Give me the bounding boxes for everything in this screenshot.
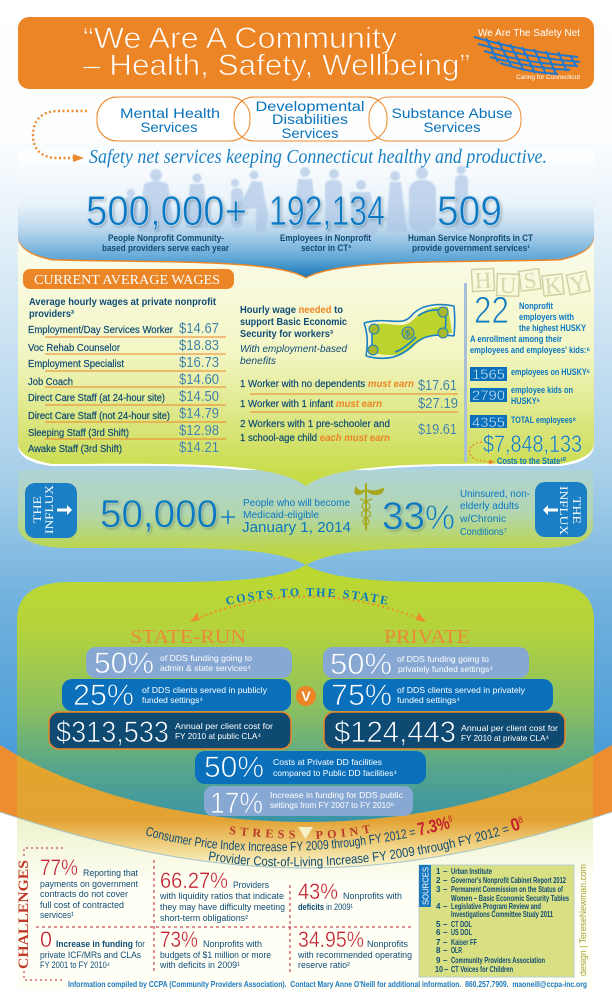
needed wage intro text: With employment-based: [240, 344, 347, 355]
designer credit: design | TereseNewman.com: [578, 864, 589, 976]
costs comparison 50%: 50%: [204, 751, 264, 784]
husky 22 employers: employers with: [519, 312, 574, 322]
sources list: –: [443, 885, 448, 894]
state-run: 50% funding: of DDS funding going to: [160, 653, 252, 663]
title: [83, 22, 470, 82]
sources list: –: [443, 920, 448, 929]
panel: the influx: [18, 470, 593, 565]
private: 50% funding: of DDS funding going to: [397, 654, 489, 664]
influx right badge: INFLUX: [557, 486, 571, 535]
challenge: 77%: full cost of contracted: [40, 900, 124, 910]
stat 500,000+: 500,000+: [86, 187, 247, 234]
husky cost to state: Costs to the State¹⁰: [497, 456, 566, 466]
icon: caduceus: [355, 484, 384, 530]
challenge: 43%: 43%: [298, 879, 338, 904]
sources list: Investigations Committee Study 2011: [451, 910, 553, 919]
challenge: 66.27%: [159, 868, 285, 923]
sources list: 8: [436, 946, 441, 955]
challenge: 34.95%: 34.95%: [298, 927, 364, 952]
husky 22 employers: A enrollment among their: [470, 334, 562, 344]
state-run: annual cost: FY 2010 at public CLA⁴: [175, 731, 261, 741]
husky counts: HUSKY⁶: [511, 396, 540, 406]
wages pill heading: CURRENT AVERAGE WAGES: [34, 273, 220, 288]
needed wage rows: $19.61: [418, 421, 457, 438]
wage table: $14.50: [179, 388, 219, 405]
sources list: –: [443, 956, 448, 965]
developmental disabilities label: [256, 98, 364, 141]
sources list: –: [443, 867, 448, 876]
husky 22 employers: Nonprofit: [519, 301, 553, 311]
sources list: Governor's Nonprofit Cabinet Report 2012: [451, 876, 566, 885]
sources list: –: [444, 965, 449, 974]
state-run: 50% funding: [86, 647, 292, 680]
influx text: uninsured: Conditions⁷: [460, 527, 507, 538]
influx big number 50,000+: +: [219, 501, 237, 534]
wage table: $12.98: [179, 422, 219, 439]
sources list: 1: [436, 867, 441, 876]
needed wage rows: 1 school-age child each must earn: [240, 433, 390, 444]
wage table: Voc Rehab Counselor: [28, 343, 121, 354]
state-run: 25% clients: funded settings⁴: [142, 695, 203, 705]
influx text: uninsured: [459, 489, 530, 538]
challenge: 73%: 73%: [160, 927, 198, 952]
sources list: OLR: [451, 946, 462, 955]
mental health label: Services: [140, 119, 198, 135]
wage table: $16.73: [179, 354, 219, 371]
state-run: annual cost: [49, 712, 291, 749]
sources list: 6: [436, 928, 441, 937]
husky counts: 4355: [472, 414, 505, 430]
sources tab: SOURCES: [420, 867, 430, 905]
husky counts: 2790: [472, 387, 505, 403]
sources list: 2: [436, 876, 441, 885]
stress point CPI lines: Provider Cost-of-Living Increase FY 2009 through FY 2012 = 0: [208, 818, 520, 868]
sources list: 3: [436, 885, 441, 894]
state-run: 50% funding: admin & state services⁴: [160, 663, 251, 673]
sources list: Urban Institute: [451, 867, 492, 876]
challenge: 66.27%: with liquidity ratios that indicate: [159, 891, 284, 901]
panel: top services section: [18, 146, 594, 278]
panel: challenges: [16, 848, 414, 980]
challenge: 73%: with deficits in 2009¹: [159, 960, 240, 970]
substance abuse label: [392, 105, 513, 135]
state-run: 50% funding: 50%: [94, 647, 154, 680]
wage table: $18.83: [179, 337, 219, 354]
costs heading with arc arrow: [190, 588, 426, 622]
title: “We Are A Community: [83, 22, 397, 55]
stress point heading: [230, 824, 370, 839]
wages pill heading: [23, 269, 234, 289]
state-run heading: STATE-RUN: [130, 626, 246, 648]
challenge: 34.95%: [297, 927, 412, 970]
logo: safety net: Caring for Connecticut: [516, 74, 580, 81]
sources list: –: [443, 876, 448, 885]
challenge: 0 increase: 0: [40, 927, 52, 952]
sources list: [435, 867, 569, 974]
stat 509: provide government services¹: [412, 243, 530, 253]
orange side strips: [0, 745, 612, 868]
challenge: 43%: deficits in 2009¹: [298, 902, 353, 912]
challenges vertical heading: CHALLENGES: [16, 860, 32, 969]
developmental disabilities label: Services: [282, 125, 338, 141]
wage table: Employment/Day Services Worker: [28, 325, 174, 336]
wages intro text: providers³: [29, 309, 75, 320]
husky counts: employees on HUSKY⁶: [511, 367, 590, 377]
sources list: 9: [436, 956, 441, 965]
sources list: Women – Basic Economic Security Tables: [451, 894, 569, 903]
influx right badge: [535, 482, 587, 537]
wages intro text: Average hourly wages at private nonprofit: [29, 297, 217, 308]
sources list: 5: [436, 920, 441, 929]
sources list: 4: [436, 902, 441, 911]
funding increase 17%: Increase in funding for DDS public: [270, 790, 404, 800]
challenge: 66.27%: Providers: [233, 880, 269, 890]
arc line under stress band: [0, 812, 612, 868]
icon: dollar bill: [364, 305, 455, 358]
needed wage intro text: Hourly wage needed to: [240, 305, 343, 316]
husky block title: U: [499, 273, 517, 298]
needed wage intro text: [240, 305, 347, 367]
husky divider: [464, 283, 467, 462]
wage table: Employment Specialist: [28, 359, 124, 370]
challenge: 34.95%: Nonprofits: [367, 939, 408, 949]
influx text: Medicaid eligible: Medicaid-eligible: [243, 510, 319, 521]
state-run: annual cost: $313,533: [56, 716, 169, 749]
private: annual cost: [324, 712, 565, 749]
influx left badge: [25, 483, 77, 538]
needed wage intro text: support Basic Economic: [240, 317, 347, 328]
state-run: 25% clients: [62, 679, 291, 712]
wage table: $14.60: [179, 371, 219, 388]
influx text: Medicaid eligible: People who will become: [243, 498, 350, 509]
challenge: 34.95%: with recommended operating: [297, 950, 412, 960]
challenge: 73%: Nonprofits with: [203, 939, 262, 949]
husky counts: [470, 366, 590, 430]
challenge: 77%: services¹: [40, 910, 74, 920]
logo: safety net: We Are The Safety Net: [478, 28, 580, 39]
mental health label: [120, 105, 220, 135]
developmental disabilities label: Disabilities: [272, 111, 348, 127]
stat 500,000+: People Nonprofit Community-: [108, 233, 224, 243]
stat 192,134: Employees in Nonprofit: [280, 233, 371, 243]
influx text: uninsured: Uninsured, non-: [460, 489, 530, 500]
private: 50% funding: [323, 647, 529, 681]
influx left badge: INFLUX: [42, 485, 56, 534]
header band: [18, 17, 594, 89]
challenge: 77%: 77%: [40, 855, 78, 880]
needed wage rows: 1 Worker with 1 infant must earn: [240, 399, 382, 410]
needed wage rows: $17.61: [418, 377, 457, 394]
wage table: Sleeping Staff (3rd Shift): [28, 428, 129, 439]
orange stress band: [17, 755, 593, 868]
versus badge: [296, 686, 316, 706]
private heading: PRIVATE: [384, 626, 470, 648]
wage table: $14.67: [179, 320, 219, 337]
sources list: Community Providers Association: [451, 956, 545, 965]
private: annual cost: FY 2010 at private CLA⁴: [461, 733, 549, 743]
sources list: –: [443, 928, 448, 937]
state-run: annual cost: Annual per client cost for: [175, 721, 273, 731]
husky 22 employers: employees and employees' kids:⁶: [470, 345, 590, 355]
wage table: $14.79: [179, 405, 219, 422]
stat 500,000+: [86, 187, 247, 253]
wage table: Direct Care Staff (at 24-hour site): [28, 393, 165, 404]
husky cost to state: $7,848,133: [483, 431, 582, 458]
wage table: [28, 320, 226, 456]
private: annual cost: Annual per client cost for: [461, 723, 558, 733]
sources list: Kaiser FF: [451, 938, 477, 947]
needed wage rows: $27.19: [418, 395, 458, 412]
wage table: Direct Care Staff (not 24-hour site): [28, 411, 170, 422]
substance abuse label: Services: [424, 119, 480, 135]
developmental disabilities label: Developmental: [256, 98, 364, 114]
wages intro text: [29, 297, 217, 320]
costs heading with arc arrow: COSTS TO THE STATE: [226, 588, 388, 605]
sources list: Permanent Commission on the Status of: [451, 885, 563, 894]
funding increase 17%: settings from FY 2007 to FY 2010⁸: [270, 800, 394, 810]
influx text: Medicaid eligible: January 1, 2014: [242, 519, 351, 536]
dotted arrow: services to tagline: [33, 111, 87, 162]
influx right badge: THE: [570, 497, 584, 524]
panel: current wages backing: [18, 243, 594, 489]
challenge: 77%: Reporting that: [83, 868, 138, 878]
substance abuse label: Substance Abuse: [392, 105, 513, 121]
stat 509: Human Service Nonprofits in CT: [408, 233, 533, 243]
challenge: 43%: [298, 879, 402, 912]
challenges vertical heading: [16, 848, 63, 980]
husky block title: [471, 267, 590, 299]
sources list: 10: [435, 965, 443, 974]
challenge: 0 increase: private ICF/MRs and CLAs: [40, 950, 141, 960]
needed wage intro text: benefits: [240, 356, 276, 367]
stat 509: [408, 187, 533, 253]
husky block title: S: [522, 267, 538, 294]
stress point CPI lines: Consumer Price Index Increase FY 2009 through FY 2012 = 7.3%: [146, 816, 450, 852]
challenge: 0 increase: Increase in funding for: [56, 939, 145, 949]
title: – Health, Safety, Wellbeing”: [83, 49, 470, 82]
sources panel: [419, 865, 574, 977]
challenge: 34.95%: reserve ratio²: [298, 960, 350, 970]
stat 509: 509: [437, 187, 502, 234]
husky counts: TOTAL employees⁸: [511, 415, 576, 425]
private: 75% clients: funded settings⁴: [397, 695, 460, 705]
husky block title: K: [543, 272, 563, 299]
stat 500,000+: based providers serve each year: [102, 243, 229, 253]
challenge: 77%: contracts do not cover: [40, 889, 128, 899]
influx big number 33%: 33: [382, 495, 425, 538]
stress point CPI lines: 8: [448, 816, 452, 822]
panel: current wages: [18, 243, 594, 486]
stat 192,134: 192,134: [269, 187, 385, 234]
safety net tagline: Safety net services keeping Connecticut healthy and productive.: [89, 146, 547, 168]
sources list: –: [443, 938, 448, 947]
sources list: CT DOL: [451, 920, 472, 929]
challenge: 77%: [40, 855, 138, 920]
service ovals: [97, 97, 521, 141]
private: 75% clients: [323, 679, 553, 712]
people silhouettes: [124, 166, 468, 240]
versus badge: V: [301, 688, 311, 704]
challenge: 66.27%: 66.27%: [160, 868, 228, 893]
needed wage intro text: Security for workers³: [240, 329, 334, 340]
wage table: $14.21: [179, 439, 219, 456]
challenge: 0 increase: [40, 927, 145, 970]
private: 75% clients: 75%: [331, 679, 392, 712]
sources list: –: [443, 946, 448, 955]
needed wage rows: 1 Worker with no dependents must earn: [240, 379, 414, 390]
influx text: Medicaid eligible: [242, 498, 351, 536]
funding increase 17%: [204, 786, 413, 820]
icon: dollar bill: $: [405, 328, 410, 338]
costs comparison 50%: compared to Public DD facilities⁴: [273, 768, 397, 778]
sources list: CT Voices for Children: [451, 965, 513, 974]
sources list: 7: [436, 938, 441, 947]
sources list: US DOL: [451, 928, 472, 937]
panel: costs to the state: [17, 565, 594, 822]
husky block title: H: [474, 268, 492, 293]
wage table: Job Coach: [28, 377, 73, 388]
logo: safety net: [474, 28, 580, 81]
husky 22 employers: the highest HUSKY: [519, 323, 586, 333]
private: annual cost: $124,443: [334, 716, 456, 749]
stress point heading: POINT: [316, 824, 370, 839]
stress point heading: STRESS: [230, 826, 295, 838]
sources list: –: [443, 902, 448, 911]
husky 22 employers: 22: [474, 290, 509, 332]
private: 75% clients: of DDS clients served in privately: [397, 685, 526, 695]
challenge: 66.27%: they may have difficulty meeting: [160, 902, 285, 912]
state-run: 25% clients: 25%: [73, 679, 134, 712]
influx big number 33%: %: [425, 499, 455, 537]
challenge: 66.27%: short-term obligations²: [160, 913, 248, 923]
challenge: 73%: budgets of $1 million or more: [160, 950, 271, 960]
state-run: 25% clients: of DDS clients served in publicly: [142, 685, 268, 695]
husky block title: Y: [567, 269, 589, 297]
needed wage rows: 2 Workers with 1 pre-schooler and: [240, 419, 390, 430]
husky counts: employee kids on: [511, 385, 573, 395]
stat 192,134: [269, 187, 385, 253]
challenge: 73%: [159, 927, 271, 970]
funding increase 17%: 17%: [210, 787, 263, 820]
influx text: uninsured: w/Chronic: [459, 514, 506, 525]
influx big number 33%: [382, 495, 455, 538]
challenge: 0 increase: FY 2001 to FY 2010⁴: [40, 960, 110, 970]
private: 50% funding: privately funded settings⁴: [398, 664, 493, 674]
sources list: Legislative Program Review and: [451, 902, 541, 911]
costs comparison 50%: Costs at Private DD facilities: [273, 757, 382, 767]
husky counts: 1565: [472, 366, 505, 382]
challenge: 43%: Nonprofits with: [343, 891, 402, 901]
ivory lower panel: [17, 810, 593, 990]
wage table: Awake Staff (3rd Shift): [28, 444, 122, 455]
mental health label: Mental Health: [120, 105, 220, 121]
challenge: 77%: payments on government: [40, 879, 138, 889]
costs comparison 50%: [195, 751, 426, 784]
influx left badge: THE: [30, 496, 44, 523]
husky 22 employers: [470, 290, 590, 355]
influx big number 50,000+: 50,000: [100, 493, 218, 536]
stat 192,134: sector in CT³: [301, 243, 351, 253]
husky cost to state: [469, 431, 582, 466]
influx text: uninsured: elderly adults: [460, 501, 519, 512]
private: 50% funding: 50%: [330, 648, 392, 681]
stress point CPI lines: 8: [518, 816, 523, 823]
needed wage rows: [240, 377, 458, 444]
